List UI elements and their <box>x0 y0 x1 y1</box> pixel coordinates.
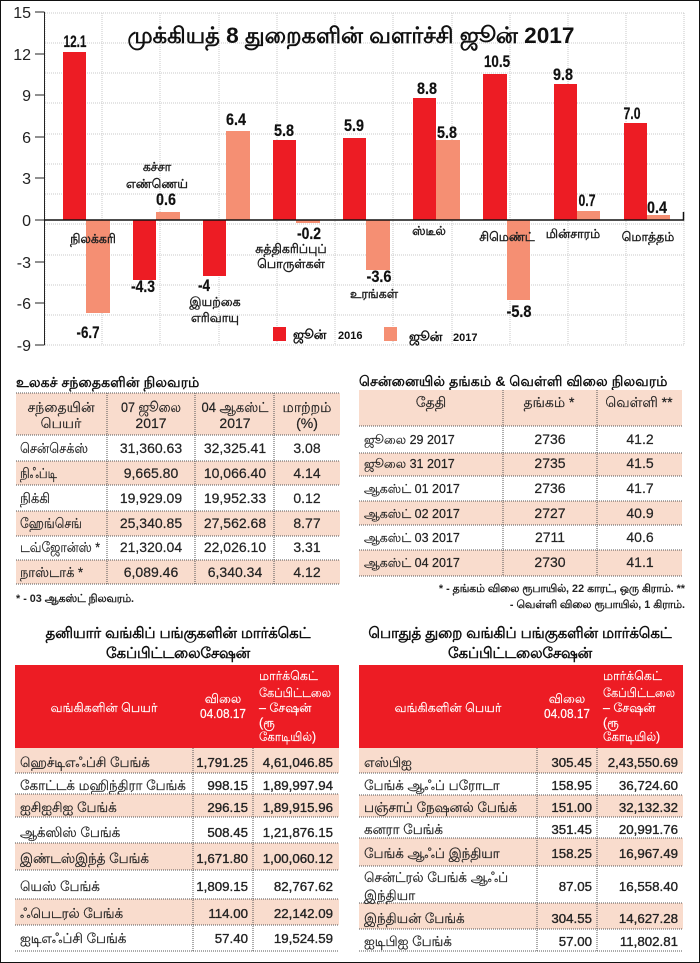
table: private banks: 1,791.25 <box>196 755 248 770</box>
table: public banks: 351.45 <box>551 822 592 837</box>
table: public banks: 2,43,550.69 <box>608 755 678 770</box>
value labels: 0.7 <box>578 191 596 210</box>
table: world markets: 04 ஆகஸ்ட் <box>202 399 268 415</box>
table: private banks: வங்கிகளின் பெயர் <box>51 701 158 715</box>
table: public banks: கனரா பேங்க் <box>364 822 443 837</box>
table: gold and silver: 2735 <box>534 455 566 471</box>
sector labels: சுத்திகரிப்புப் <box>255 242 327 257</box>
sector labels: உரங்கள் <box>350 287 399 301</box>
value labels: 5.8 <box>437 123 457 142</box>
table: world markets: 6,340.34 <box>208 564 262 580</box>
value labels: 8.8 <box>417 79 437 98</box>
table: public banks: மார்க்கெட் <box>603 669 663 683</box>
table: private banks: 296.15 <box>207 800 248 815</box>
table: gold and silver <box>359 390 682 576</box>
y axis: -6 <box>17 296 31 313</box>
table: world markets: 25,340.85 <box>120 515 182 531</box>
value labels: 0.6 <box>156 190 176 209</box>
sector labels: எரிவாயு <box>191 311 239 325</box>
table: world markets: 8.77 <box>293 515 321 531</box>
table: world markets: 2017 <box>135 415 167 431</box>
table: public banks: (ரூ <box>603 716 619 731</box>
sector labels: சிமெண்ட் <box>479 230 536 244</box>
table: public banks: 04.08.17 <box>544 707 590 721</box>
table: gold and silver: 2736 <box>534 480 566 496</box>
table: gold and silver: ஜூலை 29 2017 <box>364 433 455 448</box>
chart title: முக்கியத் 8 துறைகளின் வளர்ச்சி ஜூன் 2017 <box>128 23 574 52</box>
value labels: -3.6 <box>366 267 392 286</box>
table: gold and silver: ஜூலை 31 2017 <box>364 457 455 472</box>
y axis <box>13 5 44 355</box>
table: public banks: – சேஷன் <box>603 701 656 715</box>
table: public banks: பஞ்சாப் நேஷனல் பேங்க் <box>364 800 517 816</box>
value labels: 7.0 <box>624 104 640 123</box>
table: private banks: 114.00 <box>208 906 248 921</box>
y axis: 12 <box>13 47 31 64</box>
sector labels: இயற்கை <box>188 295 242 310</box>
table: public banks: 304.55 <box>551 911 592 926</box>
table: gold and silver: ஆகஸ்ட் 02 2017 <box>364 507 460 521</box>
table: private banks: ஆக்ஸிஸ் பேங்க் <box>20 825 120 840</box>
value labels: -6.7 <box>76 323 100 342</box>
table: private banks: 1,21,876.15 <box>263 825 333 840</box>
table: private banks: 998.15 <box>207 778 248 793</box>
table: public banks: ஐடிபிஐ பேங்க் <box>364 934 452 949</box>
value labels: -4 <box>198 276 210 295</box>
table: gold and silver: தங்கம் * <box>524 394 575 411</box>
table: gold and silver: 41.5 <box>626 455 654 471</box>
table: world markets: ஹேங்செங் <box>20 515 82 531</box>
table: gold and silver: வெள்ளி ** <box>605 394 673 410</box>
table: private banks: 1,89,915.96 <box>263 800 333 815</box>
table: world markets <box>16 393 340 584</box>
table: world markets: 3.08 <box>293 440 321 456</box>
y axis: 3 <box>22 171 31 188</box>
table: gold and silver: 41.7 <box>626 480 654 496</box>
table: private banks: கோட்டக் மஹிந்திரா பேங்க் <box>20 778 186 793</box>
sector labels: மொத்தம் <box>622 230 675 245</box>
table: world markets: 0.12 <box>293 490 321 506</box>
table: gold and silver: 41.1 <box>626 554 654 570</box>
table: gold and silver: 2730 <box>534 554 566 570</box>
y axis: 0 <box>22 213 31 230</box>
table: public banks: இந்தியா <box>364 888 415 904</box>
y axis: 9 <box>22 88 31 105</box>
heading: public banks <box>368 625 673 662</box>
heading: private banks <box>46 625 312 662</box>
table: world markets: நிக்கி <box>20 490 50 507</box>
value labels: 6.4 <box>226 110 246 129</box>
bars June 2017 <box>86 131 670 313</box>
table: world markets: 07 ஜூலை <box>121 399 181 417</box>
table: gold and silver: ஆகஸ்ட் 03 2017 <box>364 531 460 545</box>
heading: private banks: கேப்பிட்டலைசேஷன் <box>106 645 251 662</box>
value labels: 5.9 <box>344 116 364 135</box>
table: private banks: – சேஷன் <box>259 701 312 715</box>
table: private banks: விலை <box>205 692 242 706</box>
sector labels: மின்சாரம் <box>546 227 601 241</box>
table: world markets: 2017 <box>219 415 251 431</box>
table: gold and silver: 41.2 <box>626 431 654 447</box>
value labels: -4.3 <box>131 277 155 296</box>
table: public banks: விலை <box>549 692 586 706</box>
table: public banks: 87.05 <box>559 879 592 894</box>
table: public banks: 14,627.28 <box>619 911 678 926</box>
y axis: -9 <box>17 338 31 355</box>
table: world markets: 27,562.68 <box>204 515 266 531</box>
sector labels: பொருள்கள் <box>257 257 326 272</box>
table: private banks: ஐசிஐசிஐ பேங்க் <box>20 800 117 815</box>
table: gold and silver: 40.6 <box>626 529 654 545</box>
table: private banks: 1,809.15 <box>196 879 248 894</box>
table: world markets: மாற்றம் <box>283 399 331 415</box>
heading: public banks: கேப்பிட்டலைசேஷன் <box>448 645 593 662</box>
table: public banks: சென்ட்ரல் பேங்க் ஆஃப் <box>364 870 508 885</box>
value labels: 12.1 <box>64 32 86 51</box>
table: world markets: 21,320.04 <box>120 539 182 555</box>
table: public banks: 32,132.32 <box>619 800 678 815</box>
table: private banks: 4,61,046.85 <box>263 755 333 770</box>
table: private banks: ஐடிஎஃப்சி பேங்க் <box>20 931 126 946</box>
y axis: 15 <box>13 5 31 22</box>
table: public banks: 151.00 <box>551 800 592 815</box>
table: private banks: யெஸ் பேங்க் <box>20 879 100 894</box>
table: world markets: 4.14 <box>293 465 321 481</box>
table: private banks: ஹெச்டிஎஃப்சி பேங்க் <box>20 755 150 770</box>
table: world markets: 19,952.33 <box>204 490 266 506</box>
legend: ஜூன் <box>409 329 443 346</box>
table: world markets: 9,665.80 <box>124 465 178 481</box>
heading: gold and silver: சென்னையில் தங்கம் & வெள்ளி விலை நிலவரம் <box>359 374 668 391</box>
table: private banks: ஃபெடரல் பேங்க் <box>20 906 123 921</box>
table: private banks <box>15 665 339 951</box>
table: world markets: 10,066.40 <box>204 465 266 481</box>
legend <box>273 327 477 346</box>
value labels: -0.2 <box>297 224 321 243</box>
table: private banks: இண்டஸ்இந்த் பேங்க் <box>20 851 149 867</box>
table: private banks: மார்க்கெட் <box>259 669 319 683</box>
table: world markets: 22,026.10 <box>204 539 266 555</box>
table: public banks: எஸ்பிஐ <box>364 755 412 770</box>
value labels: 9.8 <box>553 65 573 84</box>
table: world markets: 3.31 <box>293 539 321 555</box>
footnote: gold and silver: - வெள்ளி விலை ரூபாயில், 1 கிராம். <box>510 599 685 612</box>
table: private banks: 57.40 <box>215 931 248 946</box>
table: private banks: 1,89,997.94 <box>263 778 333 793</box>
table: private banks: 04.08.17 <box>200 707 246 721</box>
table: gold and silver: தேதி <box>416 394 446 411</box>
table: private banks: கேப்பிட்டலை <box>259 686 332 700</box>
table: private banks: கோடியில்) <box>259 730 316 744</box>
heading: public banks: பொதுத் துறை வங்கிப் பங்குகளின் மார்க்கெட் <box>368 625 673 643</box>
value labels: -5.8 <box>506 302 532 321</box>
table: world markets: 31,360.63 <box>120 440 182 456</box>
table: world markets: நாஸ்டாக் * <box>20 564 84 581</box>
table: public banks: 158.25 <box>551 846 592 861</box>
footnote: gold and silver <box>439 583 686 612</box>
table: gold and silver: 2711 <box>535 529 565 545</box>
footnote: gold and silver: * - தங்கம் விலை ரூபாயில், 22 காரட், ஒரு கிராம். ** <box>439 583 686 596</box>
table: public banks: 20,991.76 <box>619 822 678 837</box>
value labels <box>64 32 667 342</box>
table: world markets: 19,929.09 <box>120 490 182 506</box>
table: public banks: 16,967.49 <box>619 846 678 861</box>
sector labels <box>69 160 675 325</box>
table: public banks: கேப்பிட்டலை <box>603 686 676 700</box>
y axis: -3 <box>17 255 31 272</box>
sector labels: கச்சா <box>143 160 172 174</box>
y axis: 6 <box>22 130 31 147</box>
value labels: 5.8 <box>274 121 294 140</box>
table: world markets: 4.12 <box>293 564 321 580</box>
table: world markets: சென்செக்ஸ் <box>20 440 88 456</box>
heading: world markets: உலகச் சந்தைகளின் நிலவரம் <box>16 375 199 392</box>
table: public banks: 305.45 <box>551 755 592 770</box>
table: gold and silver: 2736 <box>534 431 566 447</box>
legend: 2016 <box>338 330 362 342</box>
table: public banks: 158.95 <box>551 778 592 793</box>
sector labels: எண்ணெய் <box>126 177 188 191</box>
table: private banks: 508.45 <box>207 825 248 840</box>
legend: 2017 <box>453 332 477 344</box>
bar chart: core sector growth <box>13 5 684 355</box>
table: public banks: 36,724.60 <box>619 778 678 793</box>
legend: ஜூன் <box>293 327 327 344</box>
table: private banks: 1,671.80 <box>196 851 248 866</box>
table: gold and silver: ஆகஸ்ட் 01 2017 <box>364 482 460 496</box>
table: gold and silver: ஆகஸ்ட் 04 2017 <box>364 556 460 570</box>
table: world markets: (%) <box>296 415 318 431</box>
footnote: world markets: * - 03 ஆகஸ்ட் நிலவரம். <box>16 593 134 606</box>
table: gold and silver: 40.9 <box>626 505 654 521</box>
table: private banks: 82,767.62 <box>274 879 333 894</box>
table: public banks: பேங்க் ஆஃப் பரோடா <box>364 778 500 793</box>
heading: private banks: தனியார் வங்கிப் பங்குகளின் மார்க்கெட் <box>46 625 312 643</box>
table: public banks: 16,558.40 <box>619 879 678 894</box>
table: world markets: பெயர் <box>41 415 82 431</box>
table: gold and silver: 2727 <box>534 505 566 521</box>
table: private banks: (ரூ <box>259 716 275 731</box>
table: public banks: கோடியில்) <box>603 730 660 744</box>
table: world markets: 32,325.41 <box>204 440 266 456</box>
table: public banks: வங்கிகளின் பெயர் <box>395 701 502 715</box>
table: world markets: டவ்ஜோன்ஸ் * <box>20 539 100 557</box>
sector labels: ஸ்டீல் <box>412 224 446 238</box>
table: world markets: 6,089.46 <box>124 564 178 580</box>
table: public banks: 11,802.81 <box>620 934 678 949</box>
table: private banks: 1,00,060.12 <box>263 851 333 866</box>
table: private banks: 19,524.59 <box>274 931 333 946</box>
table: world markets: நிஃப்டி <box>20 465 57 482</box>
table: public banks: 57.00 <box>559 934 592 949</box>
value labels: 0.4 <box>647 198 667 217</box>
table: world markets: சந்தையின் <box>27 399 95 416</box>
table: public banks <box>359 665 683 951</box>
table: private banks: 22,142.09 <box>274 906 333 921</box>
sector labels: நிலக்கரி <box>69 232 116 247</box>
bars June 2016 <box>63 52 647 280</box>
table: public banks: பேங்க் ஆஃப் இந்தியா <box>364 846 500 862</box>
table: public banks: இந்தியன் பேங்க் <box>364 911 465 927</box>
value labels: 10.5 <box>484 52 510 71</box>
